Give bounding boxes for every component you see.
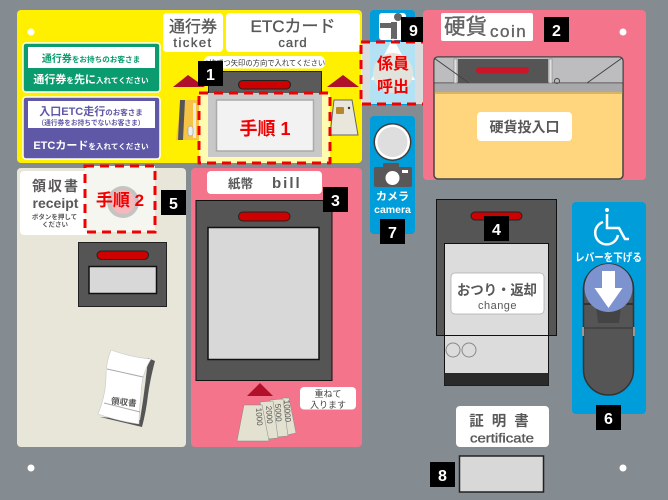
panel: accessibility lever <box>572 202 646 414</box>
highlight: step 1 <box>199 93 330 163</box>
icon: banknotes: 10000 <box>282 400 293 423</box>
badge 5: 5 <box>169 196 178 213</box>
arrow: left <box>173 75 205 87</box>
label: bill: bill <box>272 175 302 192</box>
label: ETC card: ETCカード <box>250 17 336 36</box>
panel: attendant call <box>361 10 426 105</box>
label: change: おつり・返却 <box>457 282 537 298</box>
badge 7 <box>380 219 405 244</box>
label: certificate: 証明書 <box>469 412 537 430</box>
panel: coin <box>423 10 646 180</box>
panel: bill <box>191 168 362 447</box>
label: change: change <box>478 300 517 312</box>
icon: camera <box>374 163 412 187</box>
screw holes <box>28 464 626 472</box>
icon: ETC card <box>330 100 358 135</box>
arrow: bill <box>247 383 273 396</box>
badge 3 <box>323 187 348 212</box>
badge 8: 8 <box>438 468 447 485</box>
bill slot <box>196 200 332 380</box>
badge 8 <box>430 462 455 487</box>
label: certificate: certificate <box>470 430 534 446</box>
label: receipt: 領収書 <box>32 178 80 194</box>
label: certificate <box>456 406 549 447</box>
highlight backing: step 1 <box>199 93 330 163</box>
icon: wheelchair <box>595 208 629 244</box>
label: bill: 紙幣 <box>228 176 254 191</box>
panel: camera: カメラ <box>376 190 409 203</box>
label: coin inlet: 硬貨投入口 <box>490 119 560 135</box>
highlight: step 2: 手順 2 <box>96 190 144 210</box>
arrow: right <box>327 75 359 87</box>
icon: banknotes <box>237 398 296 441</box>
certificate slot <box>460 456 544 492</box>
label: receipt: ボタンを押して <box>32 212 77 221</box>
badge 6 <box>596 405 621 430</box>
highlight: attendant call <box>361 38 425 104</box>
sign: ticket holders <box>23 43 160 92</box>
note: stack <box>300 387 356 410</box>
badge 7: 7 <box>388 225 397 242</box>
badge 1 <box>198 61 223 86</box>
badge 4 <box>484 216 509 241</box>
label: receipt: ください <box>42 220 68 228</box>
label: coin: coin <box>490 22 527 41</box>
change unit <box>436 200 556 386</box>
highlight: step 2 <box>85 166 155 232</box>
sign: ETC entry <box>23 97 160 159</box>
label: ETC card: card <box>278 35 308 50</box>
sign: ETC entry: ETCカードを入れてください <box>33 139 149 152</box>
badge 9: 9 <box>409 23 418 40</box>
sign: ticket holders: 通行券をお持ちのお客さま <box>42 52 140 65</box>
camera lens <box>374 123 412 161</box>
panel: camera <box>370 116 415 234</box>
label: receipt: receipt <box>33 195 79 211</box>
panel: receipt <box>17 166 186 447</box>
badge 2 <box>544 17 569 42</box>
label: coin inlet <box>477 112 572 141</box>
sign: ETC entry: （通行券をお持ちでないお客さま） <box>38 118 144 127</box>
panel: accessibility lever: レバーを下げる <box>575 250 642 264</box>
badge 5 <box>161 190 186 215</box>
label: change <box>451 273 544 314</box>
label: coin: 硬貨 <box>444 15 487 39</box>
note: stack: 重ねて <box>314 388 342 399</box>
highlight: attendant call: 係員 <box>377 55 409 73</box>
label: ticket <box>163 13 223 52</box>
label: ticket: ticket <box>173 35 213 50</box>
badge 4: 4 <box>492 222 501 239</box>
label: bill <box>207 171 322 194</box>
highlight: step 1: 手順 1 <box>239 119 291 139</box>
label: ETC card <box>226 13 360 52</box>
coin slot <box>434 57 623 179</box>
badge 3: 3 <box>331 193 340 210</box>
label: receipt <box>20 171 90 235</box>
badge 6: 6 <box>604 411 613 428</box>
panel: camera: camera <box>374 204 411 216</box>
badge 1: 1 <box>206 67 215 84</box>
label: ticket: 通行券 <box>169 18 217 36</box>
icon: banknotes: 2000 <box>264 406 274 424</box>
highlight: attendant call: 呼出 <box>377 78 409 96</box>
panel: ticket and ETC card <box>17 10 362 163</box>
receipt slot <box>78 242 166 306</box>
label: coin <box>441 13 533 41</box>
icon: banknotes: 5000 <box>273 404 283 422</box>
icon: attendant <box>379 13 406 40</box>
icon: receipt paper <box>98 350 155 427</box>
note: stack: 入ります <box>310 400 346 410</box>
icon: ticket <box>176 100 204 140</box>
icon: receipt paper: 領収書 <box>111 396 138 408</box>
note: insert direction: 1枚ずつ矢印の方向で入れてください <box>205 58 325 68</box>
lever <box>582 264 635 395</box>
badge 2: 2 <box>552 23 561 40</box>
card reader <box>208 72 322 157</box>
sign: ticket holders: 通行券を先に入れてください <box>33 72 149 86</box>
icon: down arrow <box>594 271 622 308</box>
icon: banknotes: 1000 <box>254 408 264 426</box>
sign: ETC entry: 入口ETC走行のお客さま <box>39 104 143 118</box>
